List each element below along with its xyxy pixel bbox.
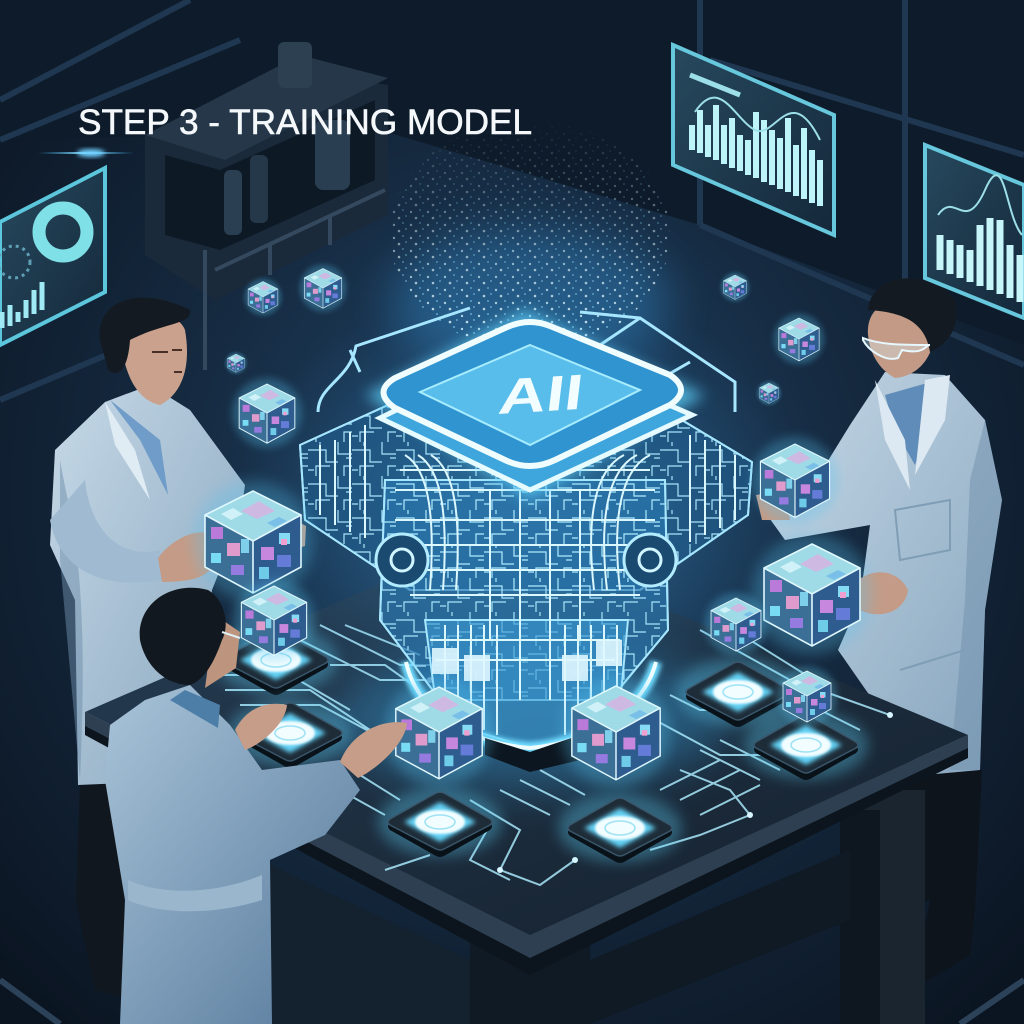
wireframe body: [300, 395, 752, 748]
holographic screen: right chart: [925, 145, 1024, 318]
left person back: [50, 298, 245, 997]
data cubes: [193, 265, 872, 787]
front person: [105, 588, 407, 1024]
glowing chip top: [365, 310, 705, 500]
holographic screen: top chart: [673, 45, 834, 235]
right person: [760, 278, 1002, 982]
particle stream: [390, 120, 675, 370]
base ring: [406, 662, 656, 748]
title: [38, 103, 532, 157]
circuit traces: [210, 625, 890, 885]
AI core engine: [235, 280, 815, 772]
shelving cabinet: [145, 42, 388, 370]
glowing pads: [214, 626, 868, 863]
title: STEP 3 - TRAINING MODEL: [78, 103, 532, 142]
AI label: AII: [496, 364, 586, 425]
hands behind cubes: [158, 490, 908, 614]
holographic screen: left donut: [0, 168, 105, 345]
table: [85, 575, 968, 1024]
